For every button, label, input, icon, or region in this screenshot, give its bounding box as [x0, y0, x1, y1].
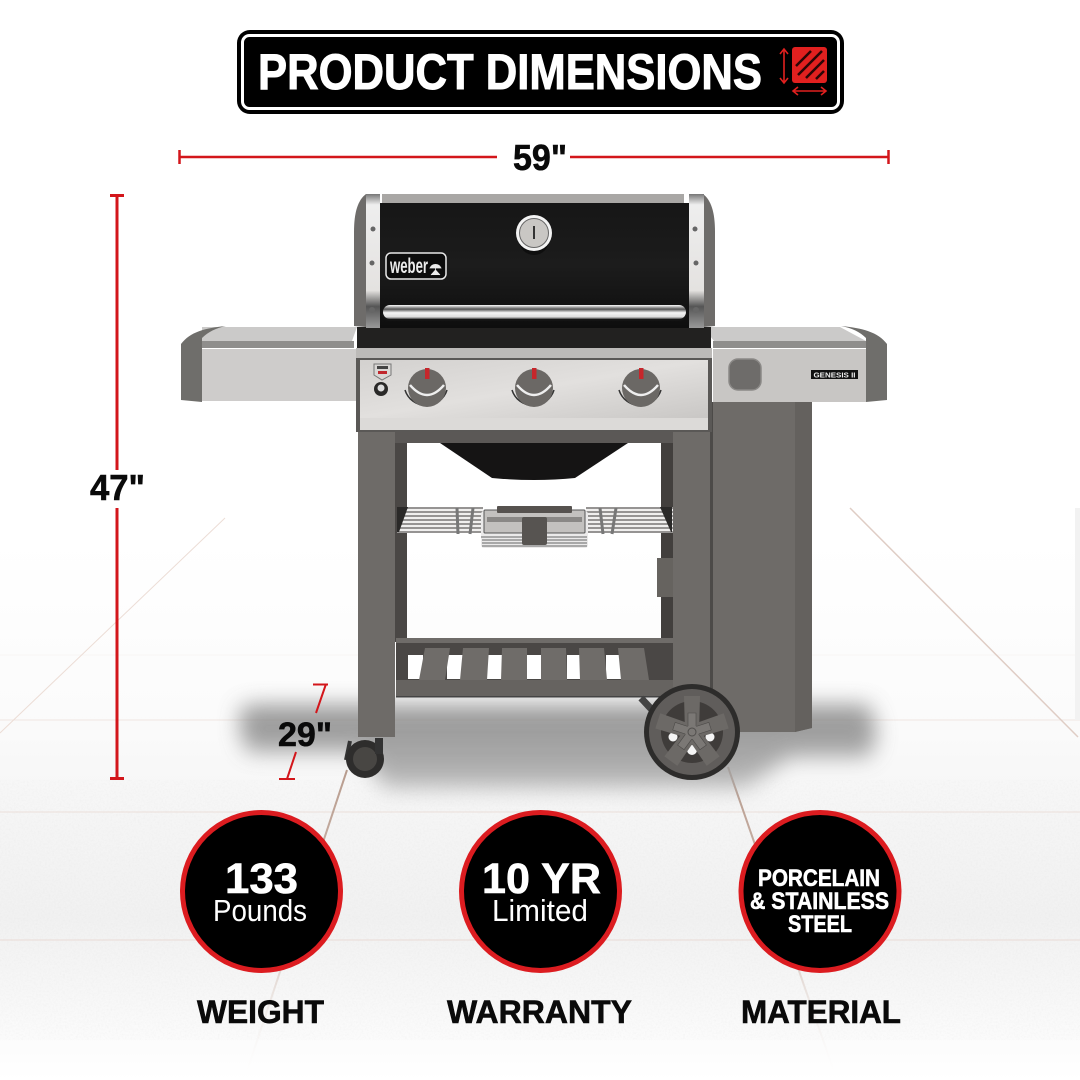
stat badge: material: PORCELAIN — [758, 865, 880, 892]
caster wheel — [346, 738, 384, 778]
knob 1 — [405, 368, 447, 407]
stat badge: weight: Pounds — [213, 893, 307, 928]
right side shelf with badge — [703, 326, 887, 402]
firebox funnel — [440, 443, 628, 480]
icon: dimensions square with arrows — [780, 47, 827, 95]
label: weight: WEIGHT — [197, 994, 324, 1030]
width dimension: 59 inches — [179, 137, 889, 178]
label: warranty: WARRANTY — [447, 994, 632, 1030]
stat badge: material: STEEL — [788, 911, 852, 938]
thermometer — [516, 215, 552, 255]
stat badge: material — [741, 812, 899, 970]
depth dimension: 29 inches: 29" — [278, 716, 332, 754]
stat badge: material: & STAINLESS — [750, 888, 889, 915]
title text: PRODUCT DIMENSIONS — [258, 44, 762, 100]
model badge: GENESIS II — [814, 372, 856, 380]
main wheel — [641, 684, 740, 780]
knob 3 — [619, 368, 661, 407]
warming shelf: wire grate and drip pan — [397, 506, 673, 548]
control panel with knobs — [356, 327, 712, 432]
depth dimension: 29 inches — [278, 684, 332, 779]
stat badge: warranty — [462, 812, 620, 970]
handle — [381, 303, 688, 321]
side burner knob — [729, 359, 761, 390]
knob 2 — [512, 368, 554, 407]
width dimension: 59 inches: 59" — [513, 137, 567, 178]
title banner: product dimensions — [237, 30, 844, 114]
weber badge: weber — [389, 255, 428, 278]
label: material: MATERIAL — [741, 994, 901, 1030]
model badge — [811, 370, 858, 380]
stat badge: warranty: 10 YR — [482, 855, 601, 903]
lid — [354, 194, 715, 328]
stat badge: weight: 133 — [225, 855, 298, 903]
legs — [358, 402, 713, 737]
grill illustration — [181, 194, 887, 780]
stat badge: weight — [182, 812, 340, 970]
left side shelf — [181, 326, 357, 402]
frame: inner posts and crossbar — [395, 430, 674, 642]
cabinet: right side — [711, 402, 812, 732]
height dimension: 47 inches — [90, 195, 145, 779]
stat badge: warranty: Limited — [492, 893, 588, 928]
bottom shelf with slats — [396, 638, 673, 698]
floor shadow under grill — [240, 705, 876, 788]
height dimension: 47 inches: 47" — [90, 467, 145, 508]
ignition button — [374, 364, 391, 396]
